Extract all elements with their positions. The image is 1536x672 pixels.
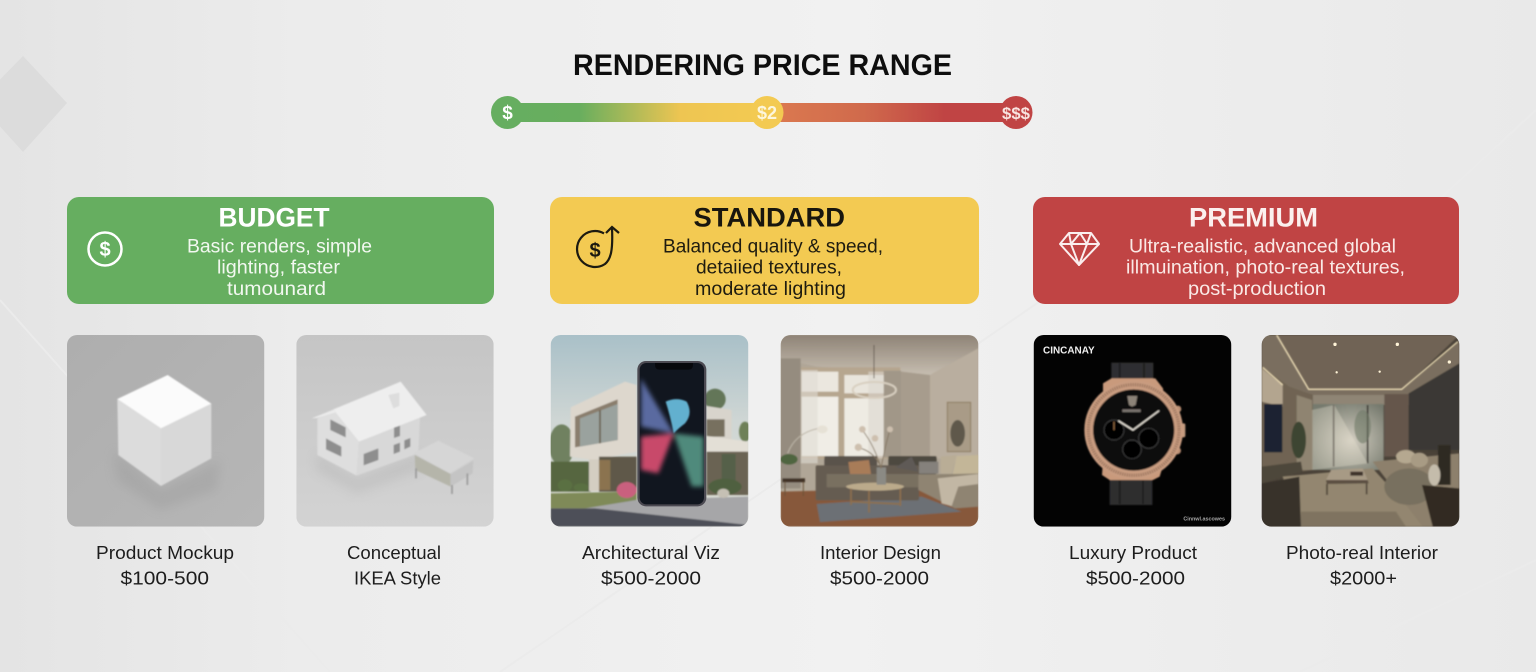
panel: premium xyxy=(1033,197,1459,304)
icon: rising dollar xyxy=(577,227,619,267)
panel: budget xyxy=(67,197,494,304)
logo text: CINCANAY xyxy=(1043,346,1095,357)
description: standard: detaiied textures, xyxy=(696,258,842,278)
caption: architectural viz xyxy=(582,543,720,588)
description: premium: illmuination, photo-real textures, xyxy=(1126,258,1405,278)
caption: conceptual xyxy=(347,543,441,588)
image: photo-real interior xyxy=(1262,335,1460,527)
caption: photo-real interior: Photo-real Interior xyxy=(1286,543,1438,563)
image: product mockup cube xyxy=(67,335,264,527)
icon: rising dollar: $ xyxy=(589,240,601,262)
heading: standard: STANDARD xyxy=(694,202,845,232)
description: premium xyxy=(1126,236,1405,300)
caption: luxury product: Luxury Product xyxy=(1069,543,1197,563)
image: conceptual house xyxy=(296,335,494,527)
caption: interior design xyxy=(820,543,941,588)
caption: product mockup xyxy=(96,543,234,588)
description: budget: tumounard xyxy=(227,279,326,300)
caption: architectural viz: $500-2000 xyxy=(601,568,701,588)
heading: premium: PREMIUM xyxy=(1189,202,1318,232)
caption: interior design: $500-2000 xyxy=(830,568,929,588)
caption: product mockup: Product Mockup xyxy=(96,543,234,563)
description: standard: Balanced quality & speed, xyxy=(663,236,883,258)
panel: standard xyxy=(550,197,979,304)
description: premium: Ultra-realistic, advanced global xyxy=(1129,236,1396,258)
caption: luxury product xyxy=(1069,543,1197,588)
caption: photo-real interior: $2000+ xyxy=(1330,568,1397,588)
image: luxury watch xyxy=(1034,335,1232,527)
caption: interior design: Interior Design xyxy=(820,543,941,563)
description: budget: lighting, faster xyxy=(217,258,341,278)
marker: low price: $ xyxy=(502,103,513,124)
caption: conceptual: Conceptual xyxy=(347,543,441,563)
marker: high price: $$$ xyxy=(1002,104,1031,123)
icon: diamond xyxy=(1060,233,1099,265)
caption: photo-real interior xyxy=(1286,543,1438,588)
marker: mid price xyxy=(750,96,784,129)
marker: high price xyxy=(1000,96,1032,129)
small print: Cinnwl.ascowes xyxy=(1183,517,1225,523)
title: RENDERING PRICE RANGE xyxy=(573,49,952,82)
description: budget: Basic renders, simple xyxy=(187,236,372,258)
caption: architectural viz: Architectural Viz xyxy=(582,543,720,563)
decorative diamond xyxy=(0,56,67,152)
price range bar xyxy=(491,96,1032,129)
description: budget xyxy=(187,236,372,300)
icon: dollar coin: $ xyxy=(99,239,111,261)
icon: dollar coin xyxy=(88,232,122,266)
caption: product mockup: $100-500 xyxy=(120,568,209,588)
marker: low price xyxy=(491,96,524,129)
caption: luxury product: $500-2000 xyxy=(1086,568,1185,588)
heading: budget: BUDGET xyxy=(218,202,330,232)
image: white cube and conceptual house xyxy=(67,335,494,526)
description: standard xyxy=(663,236,883,300)
image: architectural viz with phone xyxy=(550,335,748,527)
description: premium: post-production xyxy=(1188,279,1326,300)
caption: conceptual: IKEA Style xyxy=(354,568,441,588)
image: interior design living room xyxy=(780,335,978,527)
marker: mid price: $2 xyxy=(757,103,777,123)
description: standard: moderate lighting xyxy=(695,279,846,300)
